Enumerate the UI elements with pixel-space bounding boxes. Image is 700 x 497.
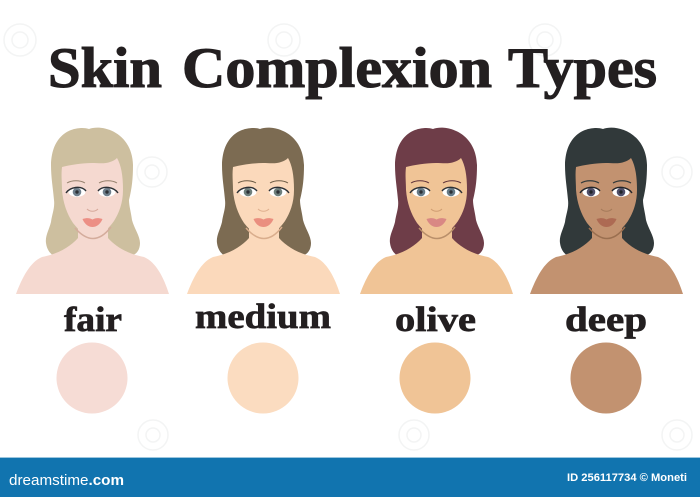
title: Skin xyxy=(48,37,162,100)
swatch: olive xyxy=(400,342,470,414)
label: medium: medium xyxy=(195,297,331,336)
footer bar xyxy=(0,457,700,497)
portrait: medium xyxy=(187,128,340,294)
swatch: medium xyxy=(228,342,298,414)
portrait: fair xyxy=(16,128,169,294)
portrait: deep xyxy=(530,128,683,294)
label: fair: fair xyxy=(64,300,122,339)
footer image id: ID 256117734 © Moneti xyxy=(567,472,687,484)
title: Types xyxy=(508,37,657,100)
label: olive: olive xyxy=(395,300,476,339)
footer logo text: dreamstime.com xyxy=(9,472,124,489)
swatch: deep xyxy=(570,342,642,414)
title: Complexion xyxy=(182,37,492,100)
label: deep: deep xyxy=(565,300,647,339)
swatch: fair xyxy=(56,342,128,414)
portrait: olive xyxy=(360,128,513,294)
title xyxy=(48,37,657,100)
